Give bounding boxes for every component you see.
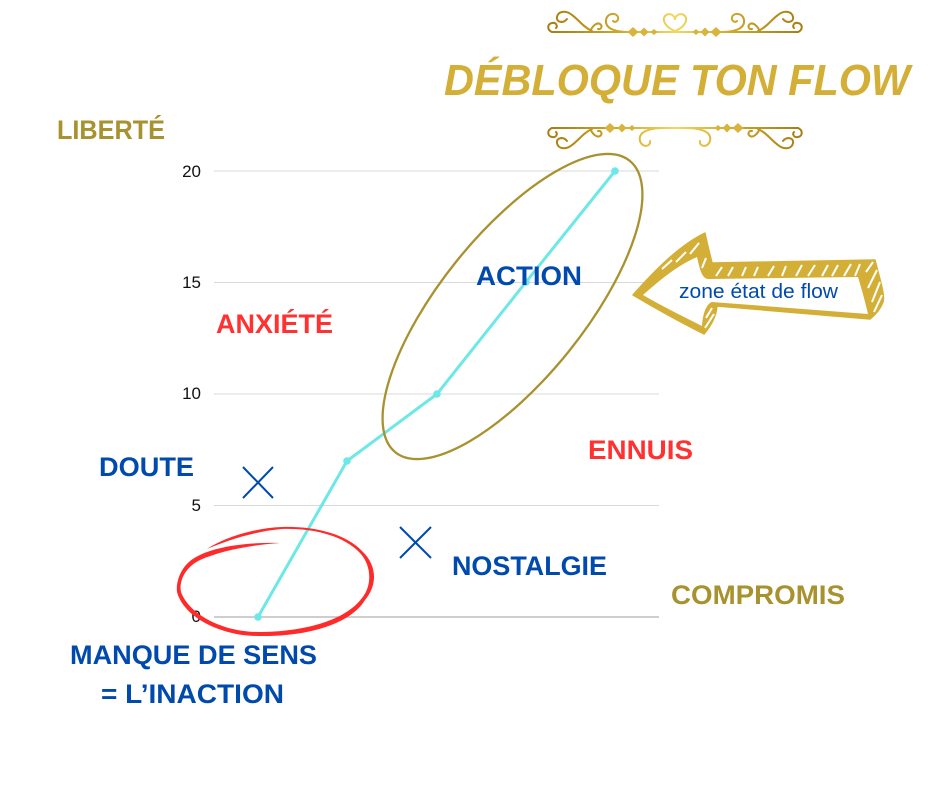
axis label: liberté: LIBERTÉ (57, 114, 165, 145)
label: inaction: = L’INACTION (101, 679, 284, 709)
label: doute: DOUTE (99, 452, 194, 482)
line chart: 5 (192, 496, 201, 515)
line chart (182, 162, 659, 626)
red hand-drawn circle (177, 527, 374, 636)
icon: cross near doute (243, 467, 273, 498)
line chart: 15 (182, 273, 201, 292)
icon: cross near nostalgie (400, 527, 431, 558)
label: nostalgie: NOSTALGIE (452, 551, 607, 581)
olive ellipse: flow zone (339, 116, 686, 497)
label: action: ACTION (476, 261, 582, 291)
label: anxiété: ANXIÉTÉ (216, 308, 333, 339)
line chart: 0 (192, 607, 201, 626)
ornament: bottom flourish (548, 123, 802, 148)
ornament: top flourish (548, 12, 802, 37)
label: manque de sens: MANQUE DE SENS (70, 640, 317, 670)
line chart: 20 (182, 162, 201, 181)
arrow: flow zone pointer (633, 233, 883, 334)
label: ennuis: ENNUIS (588, 435, 693, 465)
arrow label: zone état de flow (679, 281, 839, 303)
title: DÉBLOQUE TON FLOW (444, 55, 913, 105)
label: compromis: COMPROMIS (671, 580, 845, 610)
line chart: 10 (182, 384, 201, 403)
